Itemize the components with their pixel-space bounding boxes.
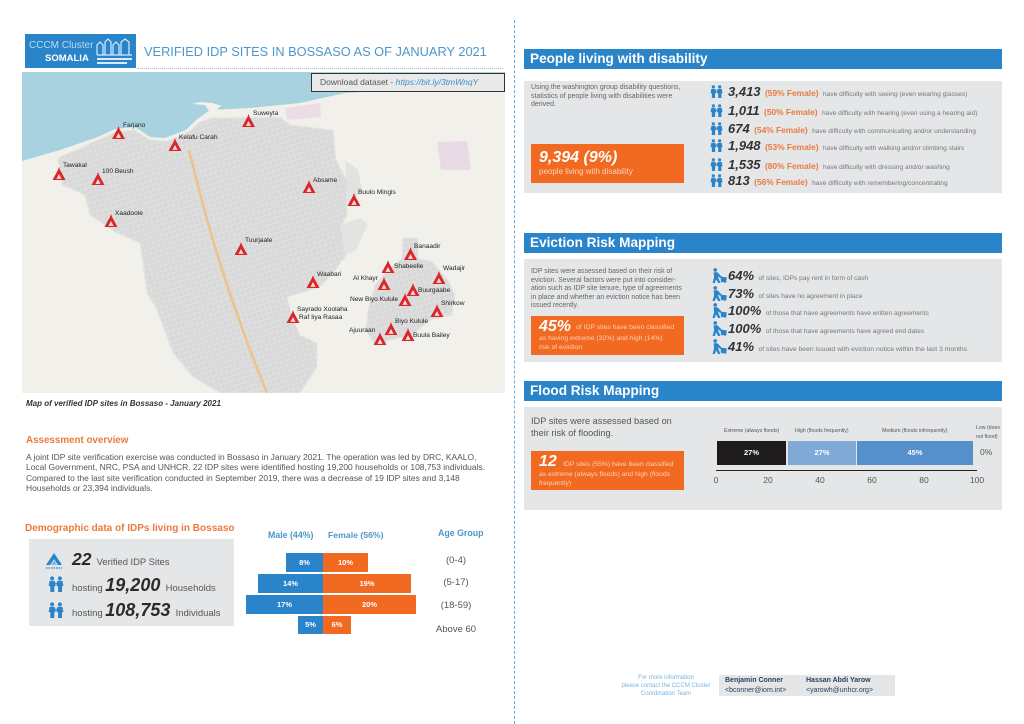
map of IDP sites: Al Khayr bbox=[353, 275, 379, 282]
axis tick labels: 40 bbox=[815, 475, 825, 485]
row 5-17: (5-17) bbox=[443, 577, 469, 588]
row: walking: 1,948 (53% Female) have difficulty with walking and/or climbing stairs bbox=[728, 138, 964, 153]
figure: individuals: hosting 108,753 Individuals bbox=[72, 600, 221, 620]
heading: eviction risk mapping: Eviction Risk Mapping bbox=[530, 235, 675, 250]
demographic heading: Demographic data of IDPs living in Bossaso bbox=[25, 523, 234, 534]
callout: flood risk: frequently) bbox=[539, 480, 571, 487]
axis tick labels: 80 bbox=[919, 475, 929, 485]
disability statistics bbox=[710, 84, 977, 188]
icon: households bbox=[48, 576, 64, 592]
eviction intro text: ation such as IDP site tenure, type of agreements bbox=[531, 285, 682, 292]
map of IDP sites: Sayrado Xoolaha bbox=[297, 306, 348, 313]
heading: people living with disability bbox=[524, 49, 1002, 69]
map of IDP sites: 100 Beush bbox=[102, 168, 134, 175]
contact note: For more information bbox=[638, 675, 694, 681]
map of IDP sites: New Biyo Kulule bbox=[350, 296, 398, 303]
flood intro text: their risk of flooding. bbox=[531, 428, 613, 438]
heading: eviction risk mapping bbox=[524, 233, 1002, 253]
contact note: Coordination Team bbox=[641, 691, 691, 697]
row above 60 bbox=[298, 616, 476, 635]
map of IDP sites: Suweyta bbox=[253, 110, 279, 117]
legend: extreme: Extreme (always floods) bbox=[724, 428, 779, 434]
eviction intro text bbox=[531, 268, 682, 309]
row: remembering: 813 (56% Female) have difficulty with remembering/concentrating bbox=[728, 173, 948, 188]
axis tick labels: 0 bbox=[714, 475, 718, 485]
row 0-4 bbox=[286, 553, 466, 572]
bar: extreme 27% bbox=[717, 441, 786, 465]
panel: eviction bbox=[524, 259, 1002, 362]
value: low 0%: 0% bbox=[980, 447, 992, 457]
assessment overview text: Compared to the last site verification conducted in September 2019, there was a decrease of 19 IDP sites and 3,148 bbox=[26, 473, 460, 483]
legend: medium: Medium (floods infrequently) bbox=[882, 428, 947, 434]
eviction intro text: IDP sites were assessed based on their risk of bbox=[531, 268, 672, 275]
contact: Benjamin Conner bbox=[725, 676, 786, 694]
assessment overview text bbox=[26, 452, 485, 493]
assessment overview text: A joint IDP site verification exercise was conducted in Bossaso in January 2021. The operation was led by DRC, KAALO, bbox=[26, 452, 476, 462]
callout: flood risk: 12 bbox=[539, 453, 557, 470]
callout: flood risk: as extreme (always floods) and high (floods bbox=[539, 471, 670, 478]
axis tick labels bbox=[714, 475, 984, 485]
contact note: please contact the CCCM Cluster bbox=[621, 683, 711, 689]
icon: tent bbox=[46, 553, 62, 569]
callout: eviction risk: of IDP sites have been classified bbox=[576, 324, 674, 331]
row: payment: 64% of sites, IDPs pay rent in form of cash bbox=[728, 268, 868, 283]
axis tick labels: 100 bbox=[970, 475, 984, 485]
map of IDP sites: Waabari bbox=[317, 271, 342, 278]
row: written agreements: 100% of those that have agreements have written agreements bbox=[728, 303, 929, 318]
panel: flood bbox=[524, 407, 1002, 510]
row above 60: 6% bbox=[332, 620, 342, 629]
contact: Hassan Abdi Yarow: Hassan Abdi Yarow bbox=[806, 677, 871, 684]
eviction intro text: eviction. Several factors were put into consider- bbox=[531, 276, 676, 284]
row above 60: Above 60 bbox=[436, 624, 476, 635]
callout: people with disability: people living with disability bbox=[539, 167, 633, 176]
axis tick labels: 20 bbox=[763, 475, 773, 485]
bar: medium 45% bbox=[857, 441, 973, 465]
contact: Benjamin Conner: <bconner@iom.int> bbox=[725, 686, 786, 694]
row: eviction notice: 41% of sites have been issued with eviction notice within the last 3 months bbox=[728, 339, 967, 354]
age group header: Age Group bbox=[438, 528, 483, 538]
map of IDP sites: Xaadoole bbox=[115, 210, 143, 217]
icon: individuals bbox=[48, 602, 64, 618]
map of IDP sites: Biyo Kulule bbox=[395, 318, 428, 325]
disability intro text: Using the washington group disability questions, bbox=[531, 84, 680, 91]
row 5-17 bbox=[258, 574, 469, 593]
callout: eviction risk: 45% bbox=[539, 318, 571, 335]
map of IDP sites: Raf Iiya Rasaa bbox=[299, 314, 343, 321]
logo: CCCM Cluster Somalia bbox=[25, 34, 136, 68]
legend: low: not flood) bbox=[976, 434, 998, 440]
row: seeing: 3,413 (59% Female) have difficulty with seeing (even wearing glasses) bbox=[728, 84, 967, 99]
callout: eviction risk: risk of eviction bbox=[539, 344, 582, 351]
eviction intro text: issued recently. bbox=[531, 302, 578, 309]
map of IDP sites: Tawakal bbox=[63, 162, 87, 169]
disability intro text: statistics of people living with disabilities were bbox=[531, 93, 672, 100]
heading: flood risk mapping bbox=[524, 381, 1002, 401]
assessment overview text: Households or 23,394 individuals. bbox=[26, 483, 153, 493]
figure: verified sites: 22 Verified IDP Sites bbox=[72, 549, 169, 569]
population pyramid bbox=[246, 528, 484, 635]
map of IDP sites: Kelafu Carah bbox=[179, 134, 218, 141]
map of IDP sites: Shirkow bbox=[441, 300, 465, 307]
row 18-59: 20% bbox=[362, 600, 377, 609]
column divider bbox=[514, 20, 515, 724]
row 0-4: 10% bbox=[338, 558, 353, 567]
map of IDP sites: Absame bbox=[313, 177, 338, 184]
row 18-59 bbox=[246, 595, 471, 614]
heading: flood risk mapping: Flood Risk Mapping bbox=[530, 383, 659, 398]
eviction intro text: in place and whether an eviction notice has been bbox=[531, 294, 680, 300]
axis tick labels: 60 bbox=[867, 475, 877, 485]
female header: Female (56%) bbox=[328, 530, 384, 540]
map of IDP sites: Buurgaabe bbox=[418, 287, 451, 294]
contact box bbox=[719, 675, 895, 696]
disability intro text bbox=[531, 84, 680, 108]
callout: people with disability bbox=[531, 144, 684, 183]
row 0-4: (0-4) bbox=[446, 555, 466, 566]
logo: CCCM Cluster Somalia: CCCM Cluster bbox=[29, 40, 93, 51]
row: no agreement: 73% of sites have no agreement in place bbox=[728, 286, 863, 301]
row: end dates: 100% of those that have agreements have agreed end dates bbox=[728, 321, 924, 336]
row: hearing: 1,011 (50% Female) have difficulty with hearing (even using a hearing aid) bbox=[728, 103, 977, 118]
row: dressing: 1,535 (80% Female) have difficulty with dressing and/or washing bbox=[728, 157, 950, 172]
legend: low bbox=[976, 425, 1000, 440]
bar: high 27% bbox=[788, 441, 856, 465]
figure: households: hosting 19,200 Households bbox=[72, 575, 216, 595]
map of IDP sites: Farjano bbox=[123, 122, 146, 129]
download dataset box: Download dataset - https://bit.ly/3tmWnqY bbox=[320, 77, 478, 87]
legend: high: High (floods frequently) bbox=[795, 428, 849, 434]
flood risk stacked bar chart bbox=[716, 425, 1000, 471]
map caption: Map of verified IDP sites in Bossaso - January 2021 bbox=[26, 399, 221, 408]
map of IDP sites: Banaadir bbox=[414, 243, 441, 250]
disability intro text: derived. bbox=[531, 101, 556, 108]
row 18-59: 17% bbox=[277, 600, 292, 609]
contact: Hassan Abdi Yarow bbox=[806, 676, 873, 694]
bar: high 27%: 27% bbox=[814, 448, 830, 457]
callout: people with disability: 9,394 (9%) bbox=[539, 149, 617, 166]
panel: disability bbox=[524, 81, 1002, 193]
row above 60: 5% bbox=[305, 620, 316, 629]
male header: Male (44%) bbox=[268, 530, 313, 540]
title underline bbox=[137, 68, 503, 69]
map of IDP sites: Ajuuraan bbox=[349, 327, 376, 334]
title: VERIFIED IDP SITES IN BOSSASO AS OF JANUARY 2021 bbox=[144, 44, 487, 59]
row 0-4: 8% bbox=[299, 558, 310, 567]
flood intro text bbox=[531, 416, 672, 438]
map of IDP sites: Shabeelle bbox=[394, 263, 424, 270]
map of IDP sites: Wadajir bbox=[443, 265, 466, 272]
map of IDP sites bbox=[22, 72, 505, 393]
assessment overview text: Local Government, NRC, PSA and UNHCR. 22 IDP sites were identified hosting 19,200 households or 108,753 individuals. bbox=[26, 462, 485, 472]
legend: low: Low (does bbox=[976, 425, 1000, 431]
callout: flood risk bbox=[531, 451, 684, 490]
logo: CCCM Cluster Somalia: SOMALIA bbox=[45, 53, 89, 64]
map of IDP sites: Tuurjaale bbox=[245, 237, 273, 244]
map of IDP sites: Buula Bailey bbox=[413, 332, 450, 339]
assessment overview heading: Assessment overview bbox=[26, 435, 128, 446]
callout: flood risk: IDP sites (55%) have been classified bbox=[563, 461, 674, 468]
contact note bbox=[621, 674, 711, 697]
callout: eviction risk bbox=[531, 316, 684, 355]
eviction statistics bbox=[712, 268, 967, 354]
map of IDP sites: Buulo Mingis bbox=[358, 189, 396, 196]
row: communicating: 674 (54% Female) have difficulty with communicating and/or understanding bbox=[728, 121, 976, 136]
row 18-59: (18-59) bbox=[441, 600, 471, 611]
contact: Benjamin Conner: Benjamin Conner bbox=[725, 677, 783, 684]
heading: people living with disability: People living with disability bbox=[530, 51, 708, 66]
row 5-17: 19% bbox=[359, 579, 374, 588]
axis line bbox=[716, 470, 977, 471]
callout: eviction risk: as having extreme (32%) and high (14%) bbox=[539, 335, 663, 342]
contact: Hassan Abdi Yarow: <yarowh@unhcr.org> bbox=[806, 686, 873, 694]
bar: extreme 27%: 27% bbox=[744, 448, 759, 457]
download dataset box bbox=[311, 73, 505, 92]
row 5-17: 14% bbox=[283, 579, 298, 588]
bar: medium 45%: 45% bbox=[907, 448, 922, 457]
flood intro text: IDP sites were assessed based on bbox=[531, 416, 672, 426]
panel: demographic key figures bbox=[29, 539, 234, 626]
